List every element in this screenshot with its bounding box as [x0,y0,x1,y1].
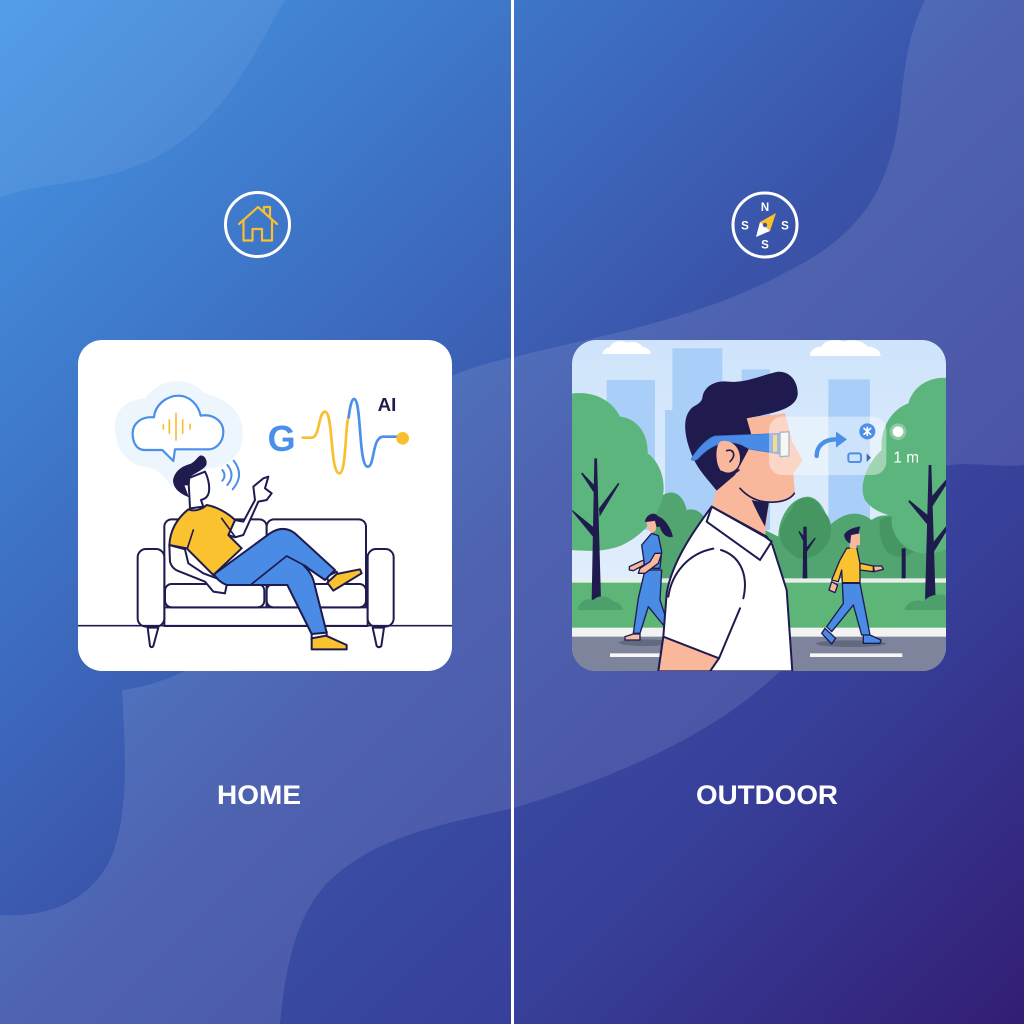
panel: outdoor scene [565,340,965,680]
divider line [511,0,514,1024]
icon: home [226,192,290,256]
icon: compass: S [761,240,769,252]
man walking [822,527,883,644]
woman walking [625,514,673,640]
floor line [78,624,452,626]
icon: compass: S [741,220,749,232]
Google AI waveform: AI [378,394,396,415]
heading: home: HOME [217,780,301,810]
man on sofa [169,456,362,649]
AR heads-up display: 1 m [893,450,919,467]
city buildings [607,348,870,530]
sofa [138,519,394,647]
voice cloud bubble [115,381,243,487]
clouds [603,340,881,356]
Google AI waveform [268,394,409,473]
icon: compass: N [761,202,769,214]
main man with smart glasses [658,372,803,671]
bushes [578,595,948,610]
background trees [652,492,948,583]
voice waves [222,461,239,489]
icon: compass [733,193,797,257]
Google AI waveform: G [268,418,296,459]
AR heads-up display [769,417,919,475]
grass and paths [572,578,946,671]
heading: outdoor: OUTDOOR [696,780,838,810]
panel: home scene [70,340,463,671]
foreground trees [565,393,664,551]
icon: compass: S [781,220,789,232]
